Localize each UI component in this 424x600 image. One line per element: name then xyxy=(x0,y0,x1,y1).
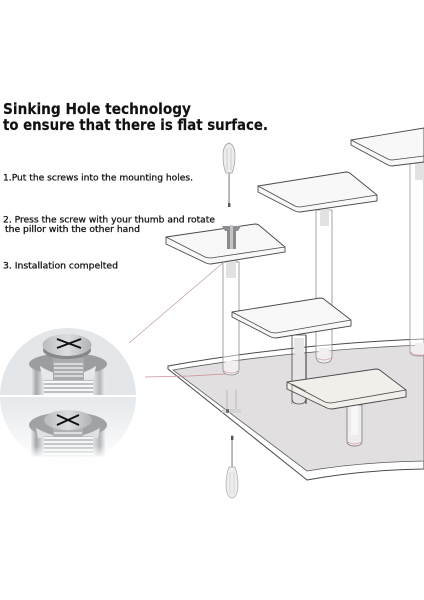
step 3: 3. Installation compelted xyxy=(3,262,118,272)
icon: lower screwdriver xyxy=(226,435,238,498)
platform: middle xyxy=(258,172,377,212)
platform: left xyxy=(166,224,285,264)
pillar: left xyxy=(223,259,239,375)
pillar: right xyxy=(410,162,424,356)
leader line: lower xyxy=(145,374,225,377)
screw under base xyxy=(222,390,241,413)
leader line: upper xyxy=(129,262,224,343)
platform: front cream xyxy=(287,369,406,409)
step 2: the pillor with the other hand xyxy=(5,225,140,235)
heading: Sinking Hole technology xyxy=(3,100,191,118)
icon: upper screwdriver xyxy=(223,143,235,207)
step 2: 2. Press the screw with your thumb and rotate xyxy=(3,216,215,226)
platform: centre xyxy=(232,298,351,338)
step 2 xyxy=(3,216,215,235)
step 1: 1.Put the screws into the mounting holes. xyxy=(3,174,193,184)
infographic canvas xyxy=(0,102,424,498)
pillar: front short xyxy=(347,405,362,446)
screw on left platform xyxy=(222,225,241,249)
base plate xyxy=(168,339,424,480)
platform: top right xyxy=(351,128,424,166)
instruction steps xyxy=(3,174,215,272)
heading xyxy=(3,100,268,134)
heading: to ensure that there is flat surface. xyxy=(3,116,268,134)
detail circle: screw seated xyxy=(0,397,136,457)
pillar: middle xyxy=(316,208,332,363)
detail circle: screw before seating xyxy=(0,328,136,395)
pillar: centre xyxy=(292,335,306,404)
